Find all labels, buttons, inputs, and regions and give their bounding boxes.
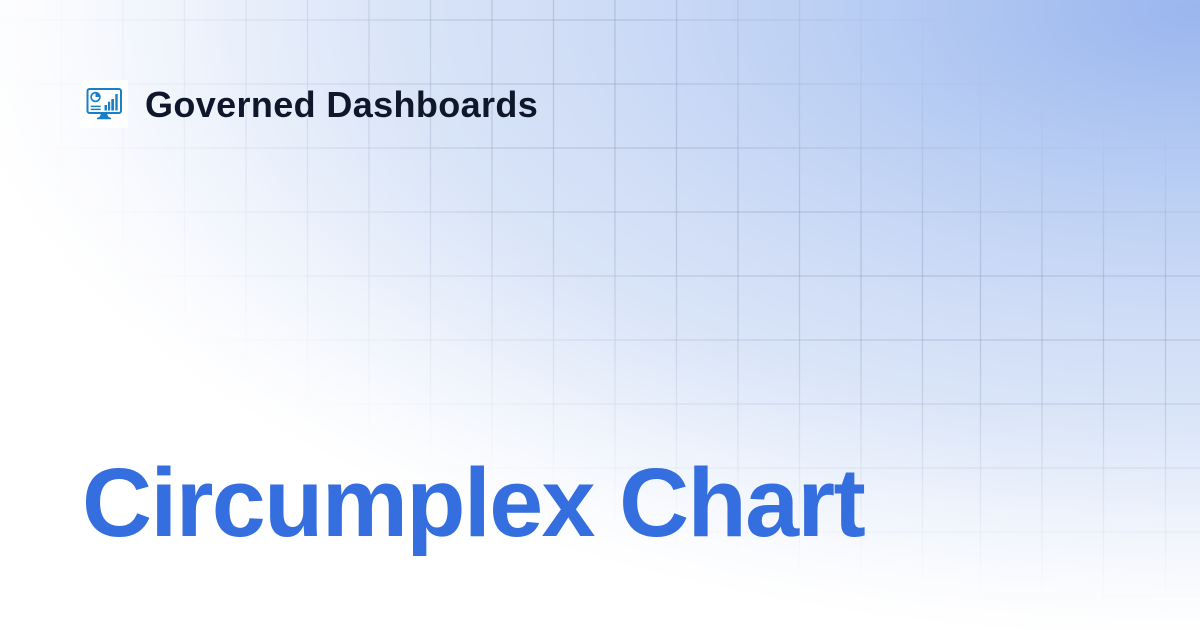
brand name: Governed Dashboards	[145, 84, 538, 125]
text lines	[91, 106, 101, 109]
monitor frame	[88, 89, 121, 113]
icon: dashboard monitor logo	[80, 80, 128, 128]
grid pattern	[122, 0, 1200, 542]
monitor stand	[97, 113, 111, 119]
title: Circumplex Chart	[82, 448, 864, 557]
pie icon	[91, 93, 100, 101]
bars	[104, 94, 118, 110]
